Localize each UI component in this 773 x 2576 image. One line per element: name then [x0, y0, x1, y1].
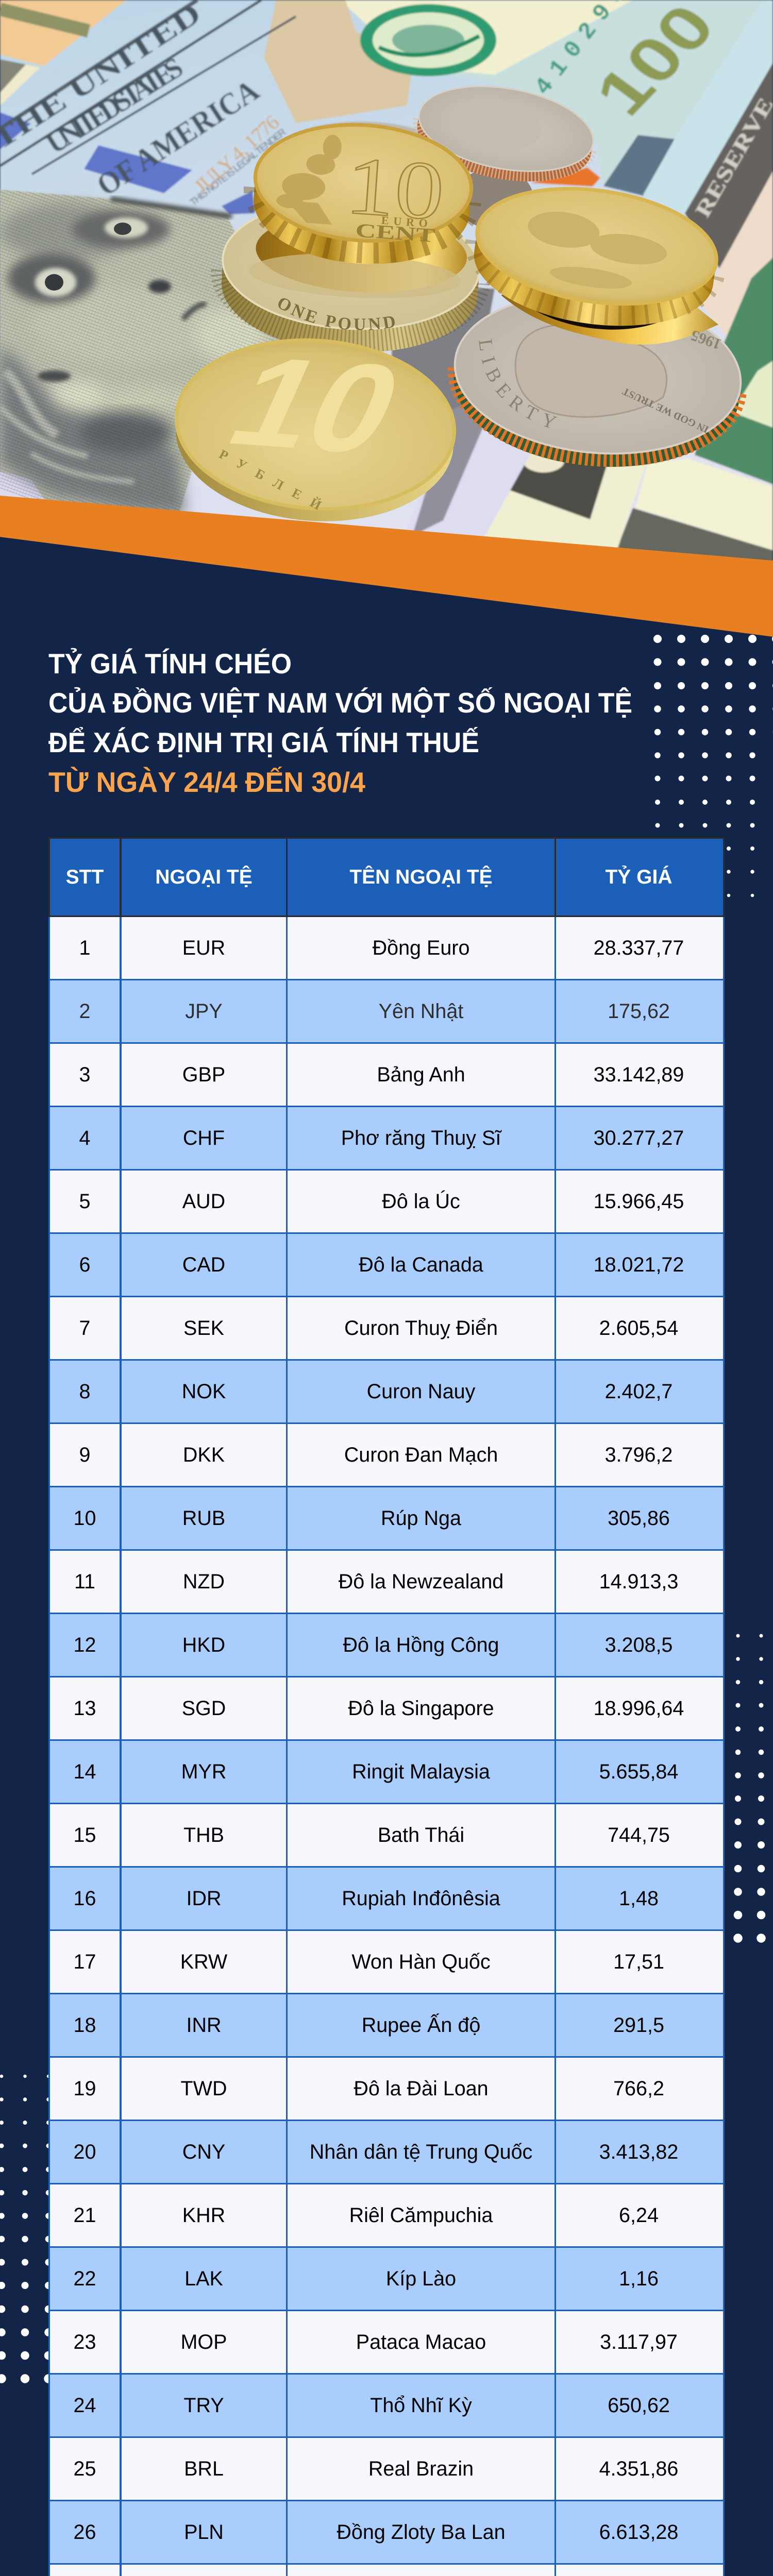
light blue strip [643, 0, 773, 213]
row 7 SEK [48, 1297, 725, 1361]
engraved title band 2 [0, 0, 261, 166]
left eye [8, 253, 95, 303]
row 23 MOP: Pataca Macao [356, 2331, 486, 2353]
row 23 MOP: 3.117,97 [600, 2331, 678, 2353]
row 16 IDR [48, 1868, 725, 1931]
row 13 SGD: 13 [74, 1697, 96, 1720]
year: 1965 [688, 327, 724, 353]
liberty bust [511, 321, 671, 425]
date text: JULY 4, 1776 [190, 110, 283, 198]
ruble word: РУБЛЕЙ [216, 447, 324, 513]
face base [0, 190, 299, 518]
row 23 MOP [48, 2311, 725, 2375]
eagle motif [520, 207, 671, 297]
row 9 DKK: 3.796,2 [605, 1444, 673, 1466]
table header: STT [66, 866, 104, 888]
row 6 CAD: 6 [79, 1253, 90, 1276]
row 5 AUD: 15.966,45 [594, 1190, 684, 1213]
shadow under gold coin [490, 199, 704, 342]
navy background panel [0, 537, 773, 2576]
row 12 HKD: 3.208,5 [605, 1634, 673, 1656]
table header: NGOẠI TỆ [155, 866, 253, 888]
table header: TÊN NGOẠI TỆ [349, 866, 493, 888]
row 16 IDR: 1,48 [619, 1887, 659, 1910]
row 15 THB: 744,75 [608, 1824, 670, 1846]
row 9 DKK [48, 1424, 725, 1487]
note heading line 2: UNITED STATES [41, 51, 189, 160]
table header: TỶ GIÁ [605, 866, 672, 888]
row 16 IDR: Rupiah Inđônêsia [342, 1887, 500, 1910]
dot pattern top right [658, 639, 773, 895]
row 19 TWD [48, 2058, 725, 2121]
row 22 LAK [48, 2248, 725, 2311]
liberty inscription: LIBERTY [479, 339, 557, 428]
hair streaks [0, 371, 134, 482]
reserve text on strip: RESERVE [691, 94, 773, 222]
euro denomination: 10 [343, 139, 447, 238]
row 4 CHF: CHF [183, 1127, 225, 1149]
row 12 HKD: 12 [74, 1634, 96, 1656]
pound inscription: ONE POUND [278, 298, 395, 330]
coin: one pound [211, 216, 490, 351]
central dark engraving [508, 453, 608, 519]
hair and beard [0, 345, 186, 515]
row 24 TRY: TRY [183, 2394, 224, 2417]
row 3 GBP: 3 [79, 1063, 90, 1086]
row 27 AED [48, 2565, 725, 2576]
row 18 INR: Rupee Ấn độ [362, 2014, 480, 2037]
legal tender note: THIS NOTE IS LEGAL TENDER [188, 127, 288, 208]
row 20 CNY: Nhân dân tệ Trung Quốc [310, 2141, 532, 2163]
row 7 SEK: Curon Thuỵ Điển [344, 1317, 498, 1340]
coin: liberty quarter [447, 295, 746, 467]
row 4 CHF [48, 1107, 725, 1171]
row 10 RUB: Rúp Nga [381, 1507, 461, 1530]
row 4 CHF: 4 [79, 1127, 90, 1149]
row 8 NOK [48, 1361, 725, 1424]
peach note corner [0, 0, 126, 66]
row 18 INR [48, 1994, 725, 2058]
right eye [72, 211, 170, 248]
row 15 THB: 15 [74, 1824, 96, 1846]
row 23 MOP: MOP [180, 2331, 227, 2353]
row 18 INR: 18 [74, 2014, 96, 2037]
engraved area between coins [392, 289, 495, 412]
row 19 TWD: 766,2 [613, 2077, 664, 2100]
engraved title band 1 [0, 0, 197, 129]
row 5 AUD: Đô la Úc [382, 1190, 460, 1213]
row 10 RUB: 10 [74, 1507, 96, 1530]
face shading [0, 204, 268, 412]
row 7 SEK: 7 [79, 1317, 90, 1340]
pale pink strip [701, 171, 773, 343]
green note panel [695, 258, 773, 484]
dark coin fragment [456, 167, 533, 229]
green note light motif [732, 361, 773, 428]
row 12 HKD [48, 1614, 725, 1677]
row 1 EUR: Đồng Euro [373, 937, 469, 959]
dark beard shadow [80, 412, 173, 453]
row 17 KRW: Won Hàn Quốc [351, 1951, 491, 1973]
exchange rate table [48, 837, 725, 2576]
row 19 TWD: 19 [74, 2077, 96, 2100]
coin: 10 rubles [170, 325, 461, 530]
row 10 RUB: RUB [182, 1507, 225, 1530]
row 1 EUR: 1 [79, 937, 90, 959]
row 6 CAD: Đô la Canada [359, 1253, 483, 1276]
dark note corner [0, 59, 26, 93]
row 6 CAD: CAD [182, 1253, 225, 1276]
row 10 RUB: 305,86 [608, 1507, 670, 1530]
engraved dot texture [0, 190, 299, 518]
nose side [183, 304, 206, 319]
portrait engraving [0, 190, 299, 518]
gold coin ribbing [468, 241, 715, 329]
note heading line 3: OF AMERICA [91, 73, 265, 202]
row 14 MYR: 5.655,84 [599, 1760, 678, 1783]
row 19 TWD: Đô la Đài Loan [354, 2077, 489, 2100]
row 26 PLN [48, 2501, 725, 2565]
row 3 GBP: Bảng Anh [377, 1063, 465, 1086]
blue stripe [84, 145, 192, 193]
row 2 JPY: 175,62 [608, 1000, 670, 1023]
gray border strip [412, 402, 490, 536]
row 26 PLN: Đồng Zloty Ba Lan [337, 2521, 506, 2544]
light shapes in engraving [523, 450, 564, 472]
coin: silver dime top [411, 74, 600, 194]
row 15 THB: THB [183, 1824, 224, 1846]
row 21 KHR [48, 2184, 725, 2248]
lavender note [402, 412, 531, 546]
title line 2: CỦA ĐỒNG VIỆT NAM VỚI MỘT SỐ NGOẠI TỆ [48, 687, 632, 719]
row 2 JPY: 2 [79, 1000, 90, 1023]
cream note panel [340, 0, 633, 77]
engraved title band 3 [32, 16, 296, 174]
row 22 LAK: Kíp Lào [386, 2267, 456, 2290]
row 25 BRL: 4.351,86 [599, 2458, 678, 2480]
row 7 SEK: 2.605,54 [599, 1317, 678, 1340]
row 4 CHF: Phơ răng Thuỵ Sĩ [341, 1127, 501, 1149]
row 15 THB: Bath Thái [378, 1824, 464, 1846]
nose [148, 280, 171, 293]
row 9 DKK: Curon Đan Mạch [344, 1444, 498, 1466]
row 14 MYR [48, 1741, 725, 1804]
row 5 AUD [48, 1171, 725, 1234]
row 5 AUD: AUD [182, 1190, 225, 1213]
row 8 NOK: 8 [79, 1380, 90, 1403]
row 14 MYR: Ringit Malaysia [352, 1760, 490, 1783]
row 25 BRL: BRL [184, 2458, 224, 2480]
orange diagonal band [0, 496, 773, 637]
row 22 LAK: LAK [184, 2267, 223, 2290]
denomination 100: 100 [581, 0, 730, 128]
row 2 JPY [48, 980, 725, 1044]
coin: 10 euro cent [250, 118, 475, 271]
row 20 CNY: 3.413,82 [599, 2141, 678, 2163]
coin gold reflection [498, 282, 720, 351]
row 11 NZD: Đô la Newzealand [339, 1570, 503, 1593]
hero photo: banknotes and coins [0, 0, 773, 568]
row 2 JPY: JPY [185, 1000, 223, 1023]
motto: IN GOD WE TRUST [620, 385, 711, 435]
row 25 BRL: Real Brazin [368, 2458, 474, 2480]
row 20 CNY: 20 [74, 2141, 96, 2163]
row 26 PLN: PLN [184, 2521, 224, 2544]
row 17 KRW [48, 1931, 725, 1994]
gold reflection on pound [254, 208, 469, 298]
row 9 DKK: 9 [79, 1444, 90, 1466]
title block [48, 648, 632, 798]
cent word: CENT [355, 219, 436, 247]
lower cream note [635, 459, 773, 550]
tan note fold [264, 0, 412, 123]
euro word: EURO [381, 214, 428, 230]
row 24 TRY: 24 [74, 2394, 96, 2417]
row 21 KHR: KHR [182, 2204, 225, 2227]
ruble denomination: 10 [209, 331, 423, 480]
row 24 TRY: Thổ Nhĩ Kỳ [370, 2394, 472, 2417]
row 13 SGD: Đô la Singapore [348, 1697, 494, 1720]
row 21 KHR: 21 [74, 2204, 96, 2227]
euro map motif [275, 131, 342, 225]
title line 1: TỶ GIÁ TÍNH CHÉO [48, 648, 292, 680]
row 13 SGD: SGD [182, 1697, 226, 1720]
row 8 NOK: Curon Nauy [367, 1380, 475, 1403]
row 25 BRL: 25 [74, 2458, 96, 2480]
row 25 BRL [48, 2438, 725, 2501]
row 22 LAK: 1,16 [619, 2267, 659, 2290]
row 19 TWD: TWD [181, 2077, 227, 2100]
row 26 PLN: 6.613,28 [599, 2521, 678, 2544]
dot pattern right middle [738, 1636, 763, 1938]
row 2 JPY: Yên Nhật [379, 1000, 463, 1023]
central cream note [477, 453, 648, 554]
silver coin behind [274, 122, 447, 188]
orange note fragment [531, 167, 600, 187]
reflection lower shade [248, 249, 462, 303]
banknote background [0, 0, 773, 567]
blue stripe left [0, 112, 31, 149]
slate blue security block [603, 135, 675, 196]
row 9 DKK: DKK [183, 1444, 225, 1466]
row 15 THB [48, 1804, 725, 1868]
row 18 INR: 291,5 [613, 2014, 664, 2037]
row 16 IDR: 16 [74, 1887, 96, 1910]
row 12 HKD: Đô la Hồng Công [343, 1634, 499, 1656]
row 17 KRW: 17 [74, 1951, 96, 1973]
olive band on peach note [0, 9, 89, 31]
row 17 KRW: 17,51 [613, 1951, 664, 1973]
table header [48, 837, 725, 917]
row 20 CNY: CNY [182, 2141, 225, 2163]
row 21 KHR: Riêl Cămpuchia [349, 2204, 493, 2227]
row 16 IDR: IDR [186, 1887, 222, 1910]
mouth [38, 370, 71, 382]
title line 3: ĐỂ XÁC ĐỊNH TRỊ GIÁ TÍNH THUẾ [48, 726, 479, 758]
brow shadow [111, 199, 232, 216]
row 7 SEK: SEK [183, 1317, 224, 1340]
row 11 NZD: NZD [183, 1570, 225, 1593]
row 10 RUB [48, 1487, 725, 1551]
pale blue note panel [412, 0, 763, 196]
row 4 CHF: 30.277,27 [594, 1127, 684, 1149]
row 5 AUD: 5 [79, 1190, 90, 1213]
dark engraved strip [685, 63, 773, 268]
row 17 KRW: KRW [180, 1951, 227, 1973]
row 13 SGD [48, 1677, 725, 1741]
green seal [360, 4, 496, 76]
row 1 EUR: EUR [182, 937, 225, 959]
lavender paper corner [0, 471, 46, 502]
row 21 KHR: 6,24 [619, 2204, 659, 2227]
row 18 INR: INR [186, 2014, 222, 2037]
row 8 NOK: 2.402,7 [605, 1380, 673, 1403]
row 3 GBP [48, 1044, 725, 1107]
row 11 NZD: 14.913,3 [599, 1570, 678, 1593]
row 11 NZD [48, 1551, 725, 1614]
row 6 CAD: 18.021,72 [594, 1253, 684, 1276]
date line: TỪ NGÀY 24/4 ĐẾN 30/4 [48, 766, 365, 798]
gold coin face [469, 174, 724, 318]
row 20 CNY [48, 2121, 725, 2184]
row 8 NOK: NOK [182, 1380, 226, 1403]
coin: right gold eagle [466, 174, 724, 344]
row 1 EUR: 28.337,77 [594, 937, 684, 959]
row 22 LAK: 22 [74, 2267, 96, 2290]
row 3 GBP: GBP [182, 1063, 225, 1086]
row 26 PLN: 26 [74, 2521, 96, 2544]
row 14 MYR: MYR [181, 1760, 226, 1783]
cream note stripe [0, 64, 40, 106]
row 14 MYR: 14 [74, 1760, 96, 1783]
row 13 SGD: 18.996,64 [594, 1697, 684, 1720]
row 3 GBP: 33.142,89 [594, 1063, 684, 1086]
lower dark strip [616, 508, 773, 564]
dot pattern left lower [2, 2076, 52, 2379]
blue fragment [222, 191, 255, 214]
row 23 MOP: 23 [74, 2331, 96, 2353]
gold coin edge [466, 229, 716, 340]
row 6 CAD [48, 1234, 725, 1297]
row 24 TRY [48, 2375, 725, 2438]
row 11 NZD: 11 [74, 1570, 95, 1593]
row 24 TRY: 650,62 [608, 2394, 670, 2417]
row 1 EUR [48, 917, 725, 980]
row 12 HKD: HKD [182, 1634, 225, 1656]
